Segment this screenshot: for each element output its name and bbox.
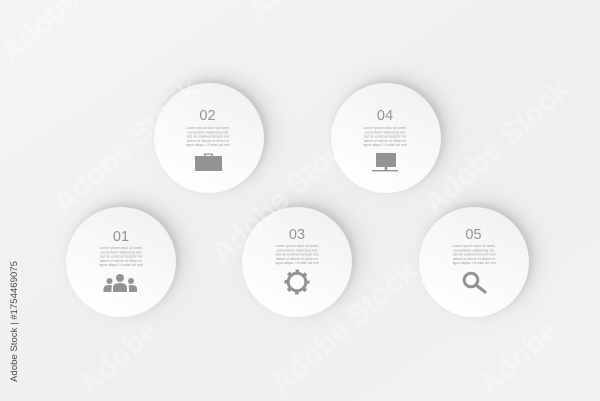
icon: magnifier [464, 273, 485, 292]
watermarks: Adobe Stock [48, 73, 206, 220]
circle 02: agna aliqua. Ut enim ad min [186, 143, 230, 147]
circle 03: agna aliqua. Ut enim ad min [275, 261, 319, 265]
circle 04 [331, 77, 449, 193]
watermarks: Adobe Stock [418, 73, 576, 220]
circle 04: agna aliqua. Ut enim ad min [363, 143, 407, 147]
circle 02: consectetur adipiscing elit, [187, 130, 229, 134]
watermarks: Adobe [473, 314, 564, 401]
circle 02: Lorem ipsum dolor sit amet, [186, 126, 230, 130]
watermarks: Adobe Stock [265, 254, 423, 401]
circle 04: sed do eiusmod tempor inci [364, 135, 407, 139]
circle 03: consectetur adipiscing elit, [276, 248, 318, 252]
circle 03: didunt ut labore et dolore m [276, 257, 318, 261]
circle 03: sed do eiusmod tempor inci [276, 253, 319, 257]
icon: briefcase [195, 154, 222, 171]
circle 02: 02 [199, 108, 216, 124]
circle 02 [154, 77, 272, 193]
circle 05: sed do eiusmod tempor inci [453, 253, 496, 257]
circle 03 [242, 201, 360, 317]
watermarks: Adobe Stock [205, 123, 363, 270]
circle 01 [66, 201, 184, 317]
circle 01: sed do eiusmod tempor inci [100, 255, 143, 259]
circle 05: 05 [465, 227, 482, 243]
circle 04: consectetur adipiscing elit, [364, 130, 406, 134]
circle 04: didunt ut labore et dolore m [364, 139, 406, 143]
circle 04: Lorem ipsum dolor sit amet, [363, 126, 407, 130]
circle 05: agna aliqua. Ut enim ad min [452, 261, 496, 265]
circle 05 [419, 201, 537, 317]
circle 03: 03 [289, 227, 305, 243]
circle 02: didunt ut labore et dolore m [187, 139, 229, 143]
icon: people [104, 274, 137, 292]
circle 05: Lorem ipsum dolor sit amet, [452, 244, 496, 248]
icon: gear [286, 271, 308, 293]
watermarks: Adobe [73, 314, 164, 401]
circle 01: consectetur adipiscing elit, [100, 250, 142, 254]
circle 05: consectetur adipiscing elit, [453, 248, 495, 252]
circle 01: Lorem ipsum dolor sit amet, [99, 246, 143, 250]
circle 01: 01 [113, 229, 129, 245]
circle 03: Lorem ipsum dolor sit amet, [275, 244, 319, 248]
icon: monitor [372, 153, 398, 171]
circle 02: sed do eiusmod tempor inci [187, 135, 230, 139]
circle 05: didunt ut labore et dolore m [453, 257, 495, 261]
circle 01: didunt ut labore et dolore m [100, 259, 142, 263]
circle 01: agna aliqua. Ut enim ad min [99, 263, 143, 267]
circle 04: 04 [377, 108, 393, 124]
side credit: Adobe Stock | #1754469075 [9, 261, 20, 382]
